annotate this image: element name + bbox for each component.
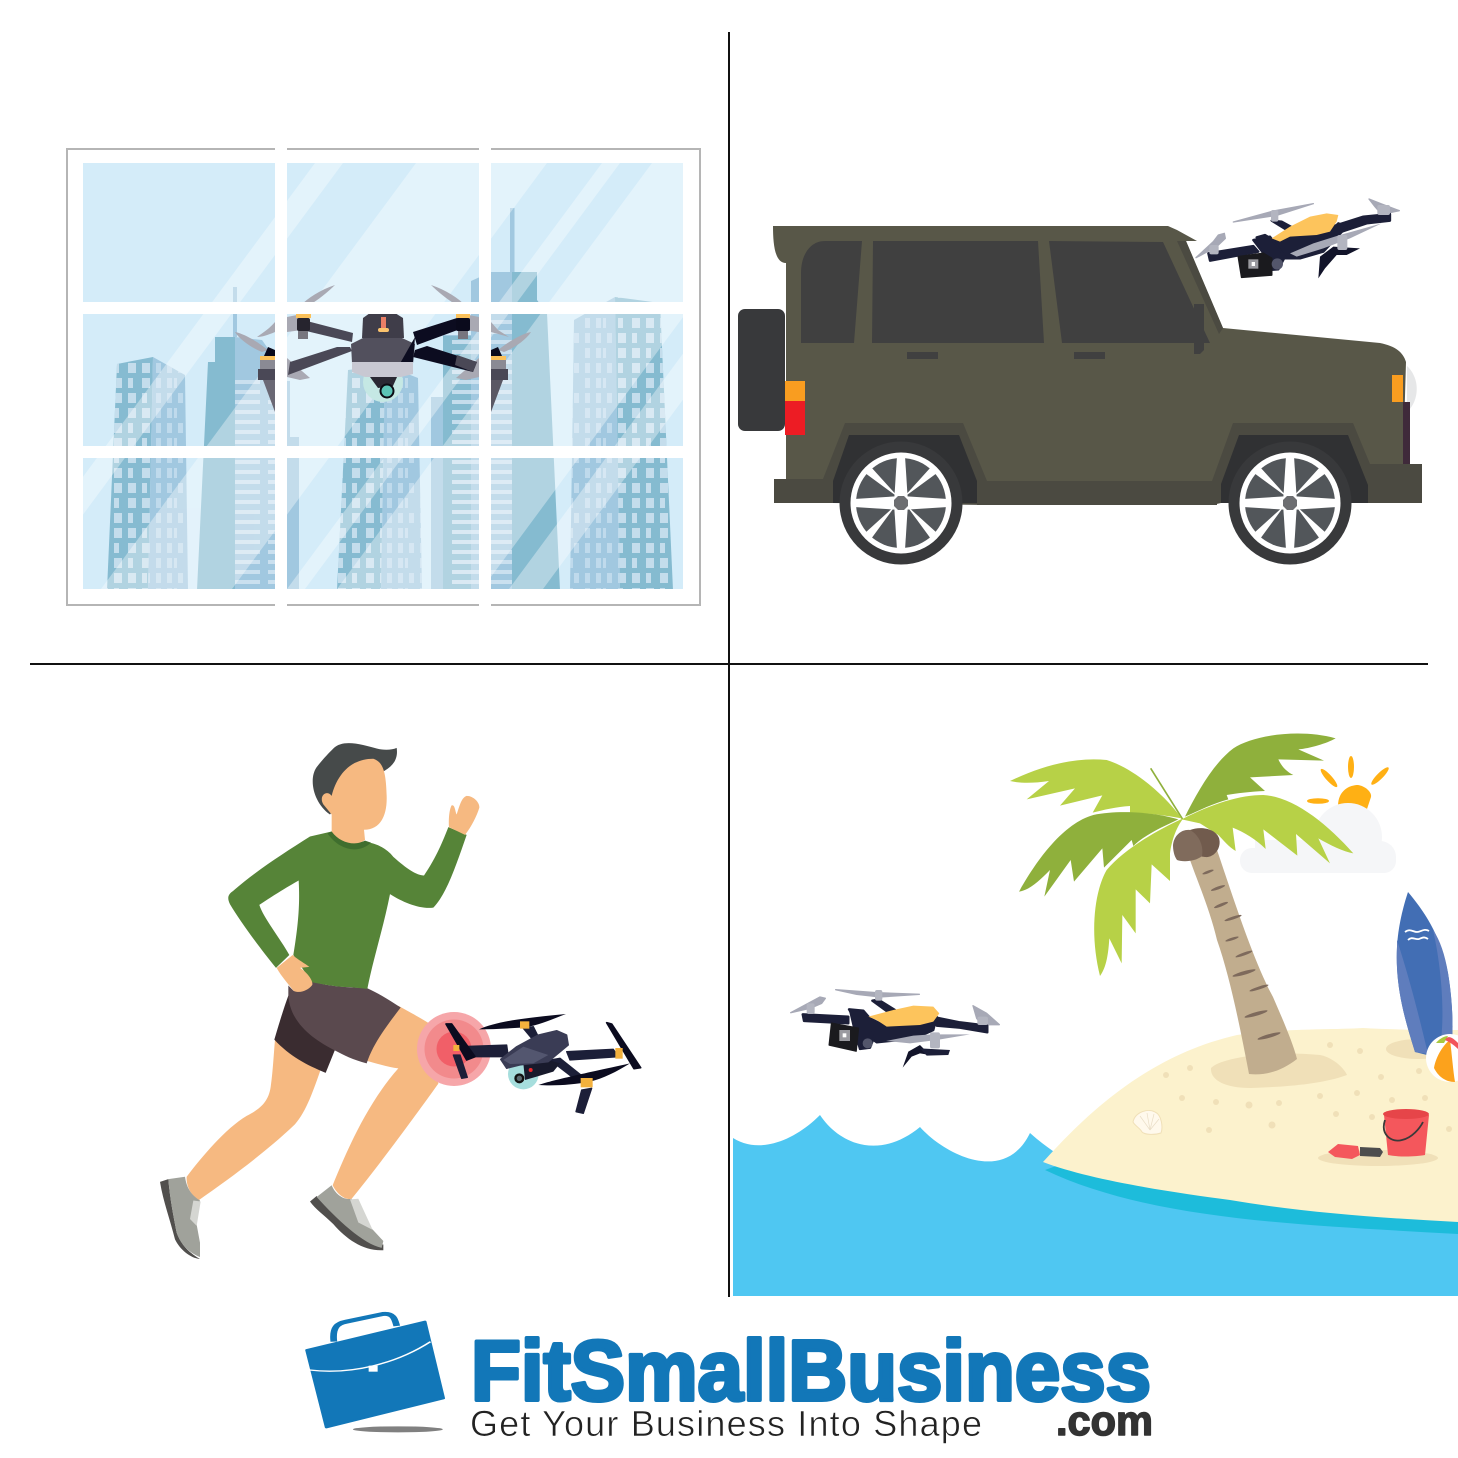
logo briefcase [307,1314,443,1432]
building 1 [107,357,188,590]
sand dots [1163,1042,1452,1133]
drone far-left motor and leg [258,347,275,412]
drone props [235,285,531,380]
divider: vertical [728,32,730,1297]
building 2 [197,287,299,590]
surfboard waves [1405,930,1429,940]
back shoe [160,1177,201,1259]
tail lights [785,381,805,435]
spare tire [738,309,785,431]
rear wheel [840,442,962,564]
building 4 [431,208,560,590]
drone body [351,313,415,402]
palm fronds [1010,734,1353,976]
coconuts [1173,828,1220,861]
SUV sill and arches [774,423,1422,505]
hair [313,743,397,815]
SUV windows [801,241,1210,359]
SUV body [773,226,1422,503]
collar [327,831,371,849]
front lights [1392,366,1417,464]
front wheel [1228,442,1352,564]
sea [733,1115,1458,1296]
glass glare [83,163,683,589]
raised hand [449,796,479,835]
panel: drone outside window [66,148,701,606]
beach ball [1426,1034,1458,1082]
seashell [1133,1110,1162,1134]
island shoreline [1045,1166,1458,1234]
back leg [187,1040,322,1200]
bucket [1383,1109,1429,1156]
logo: Fit Small Business [307,1314,1153,1444]
island sand [1043,1028,1458,1222]
cloud [1240,803,1396,873]
drone: yellow camera drone over SUV [1196,199,1399,278]
bucket and shovel shadow [1318,1150,1438,1166]
shovel [1328,1144,1383,1159]
divider: horizontal [30,663,1428,665]
wheel arch interiors [833,435,1368,503]
pain target on knee [417,1012,491,1086]
palm trunk [1190,850,1297,1074]
shorts [274,981,401,1073]
window frame bar gaps [275,147,491,607]
logo wordmark: FitSmallBusiness [471,1324,1151,1419]
tree shadow [1211,1053,1347,1088]
shirt [228,827,467,989]
windshield pillar [1177,241,1223,334]
city view through glass [83,163,683,589]
hand on hip [277,955,312,992]
head [322,759,387,843]
logo tagline: Get Your Business Into Shape [470,1403,982,1444]
building 3 [337,365,422,590]
surfboard shadow [1386,1040,1426,1059]
drone arms [288,314,477,375]
drone: yellow camera drone over sea [791,990,999,1068]
runner [160,743,479,1259]
drone: dark folding drone [446,1014,641,1113]
panel: drone hitting runner [160,743,641,1259]
surfboard stripes [1397,930,1453,1054]
drone far-right motor and leg [491,347,508,412]
panel: drone and SUV [738,199,1422,564]
palm trunk rings [1202,869,1281,1041]
panel: drone at the beach [733,734,1458,1296]
building 5 [570,297,673,590]
front shoe [310,1185,383,1250]
surfboard [1397,892,1453,1055]
drone: front view [235,285,531,412]
window frame [67,149,700,605]
logo .com: .com [1056,1397,1153,1444]
sun [1307,756,1391,812]
front leg [333,1006,438,1199]
